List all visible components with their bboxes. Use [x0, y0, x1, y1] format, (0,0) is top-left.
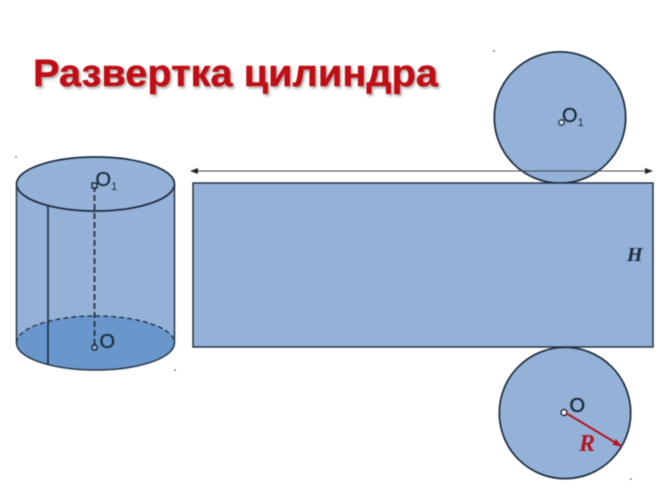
- cylinder top base: [16, 157, 174, 211]
- label H: H: [626, 244, 644, 266]
- radius arrow: [566, 413, 621, 446]
- cylinder side surface: [16, 184, 175, 370]
- circle disc: [499, 347, 631, 479]
- specks: [15, 50, 632, 480]
- circle disc: [494, 52, 626, 183]
- label O1: O: [562, 105, 578, 127]
- label O: O: [570, 395, 585, 417]
- cylinder: [16, 157, 175, 370]
- width arrow: [191, 170, 652, 172]
- cylinder outline: [16, 184, 175, 370]
- label R: R: [578, 431, 595, 457]
- hidden edge of bottom base: [16, 316, 175, 343]
- label O1: O: [96, 169, 111, 191]
- title: Развертка цилиндра: [33, 53, 439, 95]
- top circle: [494, 52, 626, 183]
- dashed axis: [94, 186, 96, 347]
- unrolled lateral surface rectangle: [193, 183, 653, 347]
- rectangle: [193, 183, 653, 347]
- center point O: [561, 410, 567, 416]
- point O: [92, 345, 97, 350]
- generatrix line: [47, 206, 49, 364]
- label O: O: [100, 331, 115, 353]
- label O1: 1: [578, 117, 584, 129]
- cylinder bottom base: [16, 316, 174, 370]
- point O1: [92, 183, 97, 188]
- bottom circle: [499, 347, 631, 479]
- label O1: 1: [111, 181, 117, 193]
- center point O1: [559, 120, 564, 125]
